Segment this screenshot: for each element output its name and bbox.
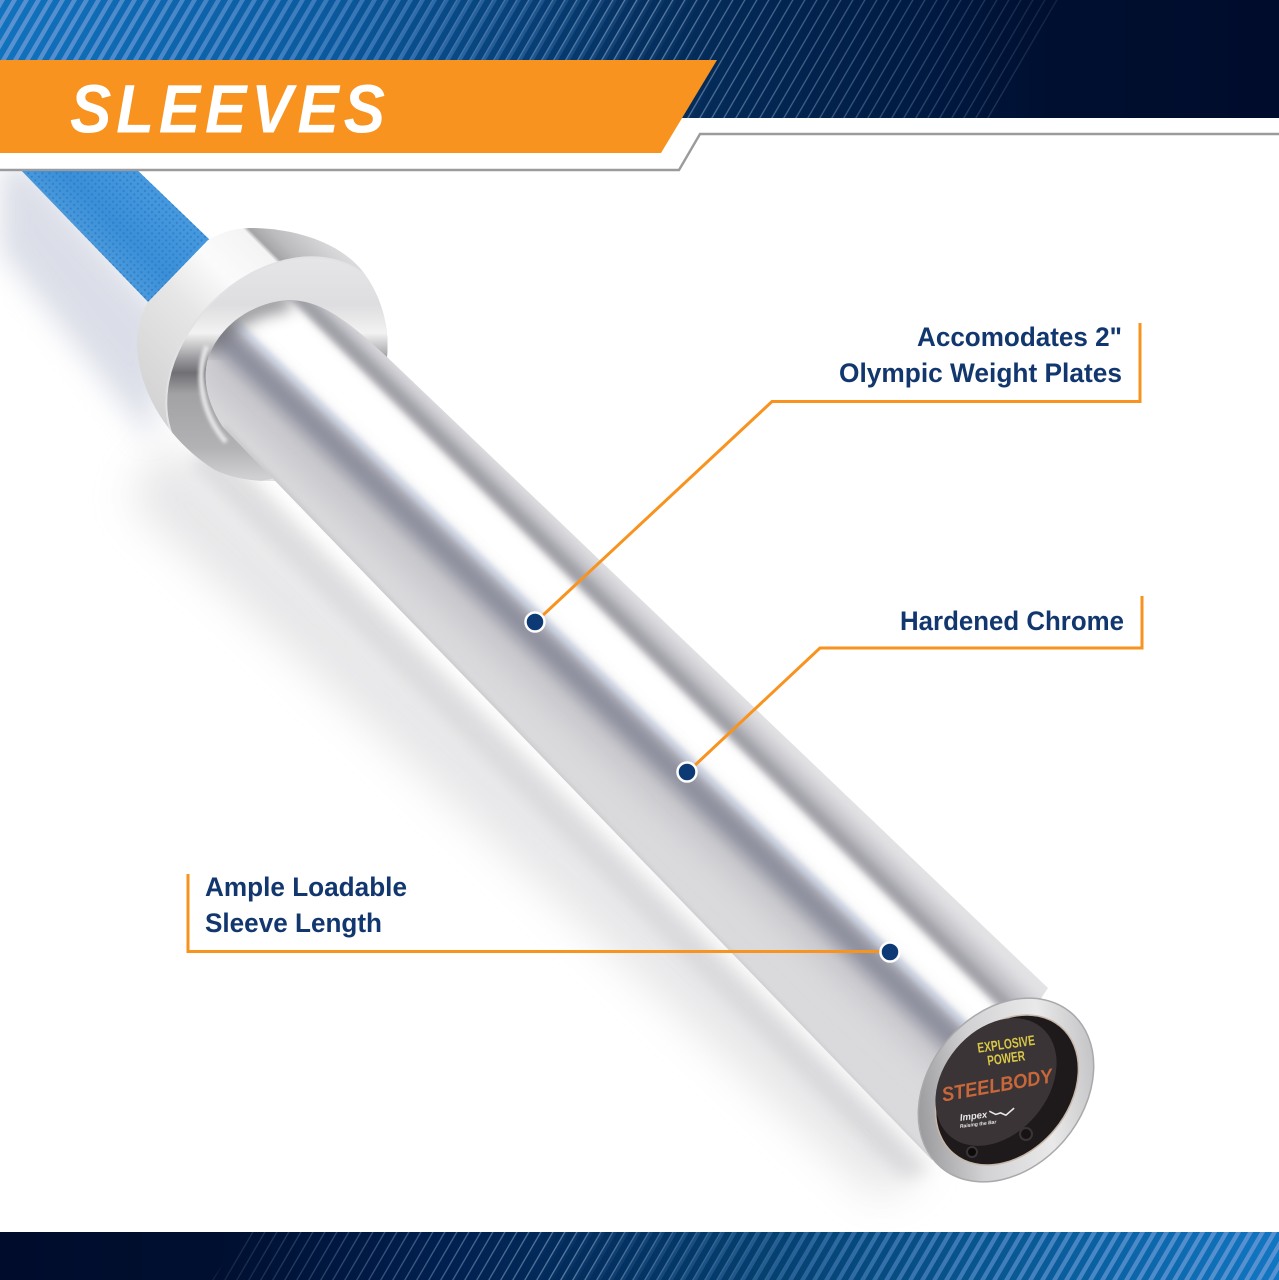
marker dot: [526, 612, 544, 632]
leader line: [692, 596, 1142, 768]
leader line: [188, 874, 882, 952]
end cap text: explosive power: [976, 1032, 1038, 1070]
end cap text: explosive power: POWER: [986, 1047, 1026, 1068]
label: Ample Loadable: [205, 872, 407, 902]
collar front face: [166, 256, 388, 481]
title banner: [0, 60, 717, 153]
label: [205, 872, 407, 938]
collar shoulder highlight: [201, 346, 226, 442]
header band: [0, 0, 1279, 118]
barbell: blue knurled shaft: [16, 165, 210, 304]
label: Sleeve Length: [205, 908, 382, 938]
end cap chrome ring: [882, 963, 1130, 1217]
barbell: collar: [137, 228, 388, 481]
end cap bolt right: [1020, 1128, 1032, 1140]
title: SLEEVES: [70, 70, 385, 147]
label: Accomodates 2": [917, 322, 1122, 352]
label: [839, 322, 1122, 388]
callout: loadable sleeve length: [188, 872, 900, 962]
header divider line: [0, 134, 1279, 170]
end cap text: impex logo: Impex: [959, 1109, 989, 1124]
footer band: [0, 1232, 1279, 1280]
callout: hardened chrome: [678, 596, 1142, 782]
barbell: chrome sleeve: [206, 300, 1048, 1160]
marker dot: [880, 942, 900, 962]
barbell: end cap: [882, 963, 1130, 1217]
end cap text: impex logo: [958, 1106, 1016, 1130]
label: Olympic Weight Plates: [839, 358, 1122, 388]
marker dot: [678, 762, 696, 782]
shadow under barbell: [0, 165, 930, 1200]
end cap text: impex logo: Raising the Bar: [960, 1119, 998, 1130]
end cap text: steelbody: STEELBODY: [940, 1065, 1056, 1107]
label: Hardened Chrome: [900, 606, 1124, 636]
callout: accommodates plates: [526, 322, 1140, 632]
end cap text: explosive power: EXPLOSIVE: [976, 1032, 1036, 1056]
end cap bolt left: [967, 1147, 977, 1157]
leader line: [541, 323, 1140, 617]
end cap label plate: [911, 994, 1081, 1170]
end cap dark recess: [906, 987, 1108, 1193]
